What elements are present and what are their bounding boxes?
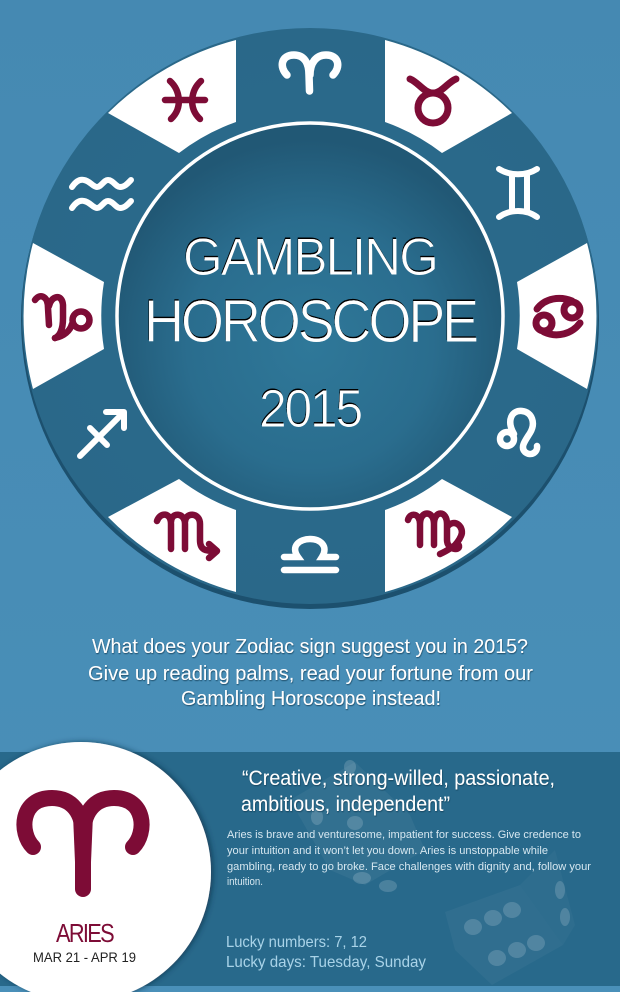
intro line 3: Gambling Horoscope instead! xyxy=(181,687,441,710)
white sign circle xyxy=(0,742,211,992)
die: side face xyxy=(520,850,575,945)
quote xyxy=(241,767,555,816)
icon: sagittarius xyxy=(80,412,124,456)
quote line 2: ambitious, independent” xyxy=(241,793,450,816)
description line 4: intuition. xyxy=(227,876,263,888)
icon: gemini xyxy=(499,169,537,217)
center disc xyxy=(117,123,503,509)
icon: libra xyxy=(284,539,336,570)
quote line 1: “Creative, strong-willed, passionate, xyxy=(242,767,555,790)
icon: leo xyxy=(500,411,537,454)
wheel shadow edge xyxy=(21,31,599,609)
panel: aries xyxy=(0,742,620,992)
title xyxy=(144,228,477,439)
wheel base xyxy=(22,28,598,604)
description line 1: Aries is brave and venturesome, impatient for success. Give credence to xyxy=(227,829,581,841)
intro text xyxy=(88,635,533,710)
icon: aquarius xyxy=(72,180,131,208)
title line: horoscope: HOROSCOPE xyxy=(144,288,477,355)
intro line 2: Give up reading palms, read your fortune from our xyxy=(88,662,533,685)
zodiac wheel xyxy=(21,28,599,609)
title line: year: 2015 xyxy=(259,379,361,439)
sign dates: MAR 21 - APR 19 xyxy=(33,949,136,965)
white segment: scorpio xyxy=(108,479,236,592)
die: upper left xyxy=(290,762,425,885)
white segment: virgo xyxy=(385,479,512,592)
die: lower right xyxy=(445,885,563,985)
icon: virgo xyxy=(408,514,462,554)
icon: scorpio xyxy=(157,515,217,558)
intro line 1: What does your Zodiac sign suggest you in 2015? xyxy=(92,635,528,658)
title line: gambling: GAMBLING xyxy=(183,228,437,287)
sign name: ARIES xyxy=(56,918,114,948)
description xyxy=(227,829,591,888)
icon: large aries xyxy=(24,798,142,889)
icon: cancer xyxy=(536,298,580,335)
pips xyxy=(311,760,570,966)
dice watermark xyxy=(290,760,575,985)
panel background band xyxy=(0,752,620,986)
lucky days: Lucky days: Tuesday, Sunday xyxy=(226,954,426,971)
white segment: cancer xyxy=(517,243,596,389)
icon: capricorn xyxy=(35,296,90,338)
icon: aries xyxy=(282,55,338,91)
white segment: taurus xyxy=(385,40,512,153)
description line 3: gambling, ready to go broke. Face challenges with dignity and, follow your xyxy=(227,861,591,873)
white segment: pisces xyxy=(108,40,236,153)
icon: taurus xyxy=(410,79,456,123)
lucky info xyxy=(226,934,426,971)
white segment: capricorn xyxy=(24,243,104,389)
lucky numbers: Lucky numbers: 7, 12 xyxy=(226,934,367,951)
icon: pisces xyxy=(165,81,205,119)
description line 2: your intuition and it won’t let you down. Aries is unstoppable while xyxy=(227,845,548,857)
